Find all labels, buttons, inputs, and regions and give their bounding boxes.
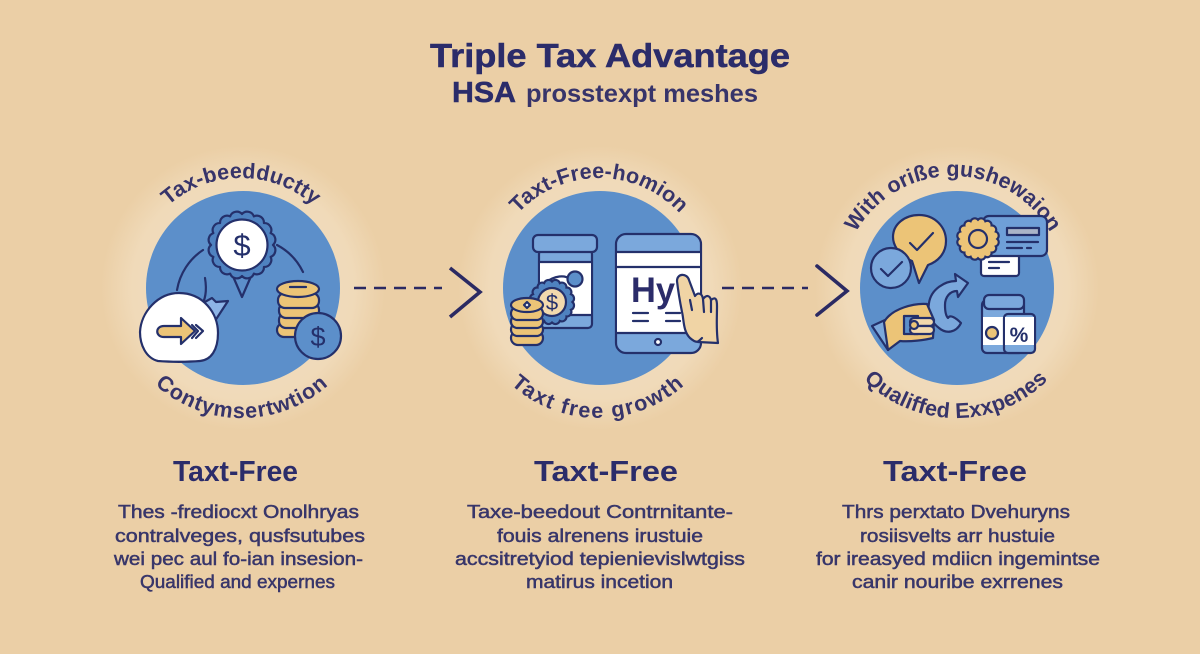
subtitle bbox=[452, 77, 758, 109]
icon: percent bottles bbox=[982, 295, 1035, 353]
halo 2 bbox=[458, 146, 742, 430]
description 3: canir nouribe exrrenes bbox=[852, 571, 1063, 592]
halo 1 bbox=[101, 146, 385, 430]
description 1: Qualified and expernes bbox=[140, 571, 335, 592]
title: Triple Tax Advantage bbox=[430, 37, 790, 74]
icon: dollar coin: $ bbox=[310, 322, 326, 352]
icon: speech bubble with check bbox=[893, 215, 946, 283]
description 2: Taxe-beedout Contrnitante- bbox=[467, 501, 733, 522]
icon: yellow gear bbox=[957, 218, 999, 260]
icon: dollar coin bbox=[295, 313, 341, 359]
curved label top 2: Taxt-Free-homion bbox=[508, 164, 686, 212]
icon: tablet bbox=[616, 234, 701, 353]
description 2: accsitretyiod tepienievislwtgiss bbox=[455, 548, 745, 569]
icon: gear with dollar bbox=[530, 280, 574, 324]
description 3 bbox=[816, 501, 1100, 592]
icon: tablet: Hy bbox=[631, 271, 676, 310]
description 3: for ireasyed mdiicn ingemintse bbox=[816, 548, 1100, 569]
description 2 bbox=[455, 501, 745, 592]
icon: pointing hand bbox=[677, 275, 718, 343]
icon: gear with dollar: $ bbox=[546, 290, 558, 315]
description 2: fouis alrenens irustuie bbox=[497, 525, 703, 546]
icon: settings card bbox=[983, 216, 1047, 256]
blue disc 2 bbox=[503, 191, 697, 385]
heading 1: Taxt-Free bbox=[173, 456, 298, 488]
description 3: Thrs perxtato Dvehuryns bbox=[842, 501, 1070, 522]
description 1: Thes -frediocxt Onolhryas bbox=[118, 501, 359, 522]
subtitle: prosstexpt meshes bbox=[526, 80, 758, 108]
icon: coin stack bbox=[511, 298, 543, 345]
arrow 2 bbox=[722, 266, 847, 315]
blue disc 3 bbox=[860, 191, 1054, 385]
icon: dollar badge: $ bbox=[233, 228, 251, 263]
curved label bottom 2: Taxt free growth bbox=[514, 373, 684, 421]
description 1: contralveges, qusfsutubes bbox=[115, 525, 365, 546]
icon: connector arcs bbox=[177, 245, 303, 308]
heading 2: Taxt-Free bbox=[534, 456, 678, 488]
curved label bottom 3: Qualiffed Exxpenes bbox=[866, 372, 1046, 418]
icon: jar bbox=[533, 235, 597, 328]
curved label bottom 1: Contymsertwtion bbox=[158, 376, 328, 418]
arrow 1 bbox=[354, 268, 480, 317]
icon: small document bbox=[981, 250, 1019, 276]
icon: check circle bbox=[871, 248, 911, 288]
icon: dollar badge bbox=[209, 212, 275, 297]
icon: coin stack bbox=[277, 281, 319, 337]
icon: hand holding card bbox=[872, 304, 934, 350]
panel: qualified expenses bbox=[816, 159, 1100, 592]
curved label top 1: Tax-beedductty bbox=[159, 162, 321, 204]
icon: percent bottles: % bbox=[1010, 324, 1029, 347]
description 2: matirus incetion bbox=[526, 571, 673, 592]
description 1: wei pec aul fo-ian insesion- bbox=[113, 548, 363, 569]
halo 3 bbox=[815, 146, 1099, 430]
icon: money bag with arrow bbox=[140, 293, 228, 362]
blue disc 1 bbox=[146, 191, 340, 385]
description 1 bbox=[113, 501, 365, 592]
panel: tax-free growth bbox=[455, 159, 745, 592]
description 3: rosiisvelts arr hustuie bbox=[860, 525, 1055, 546]
panel: tax-deductible contributions bbox=[113, 159, 372, 592]
subtitle: HSA bbox=[452, 77, 516, 109]
curved label top 3: With oriße gushewaion bbox=[843, 164, 1058, 232]
heading 3: Taxt-Free bbox=[883, 456, 1027, 488]
icon: curved arrow bbox=[928, 274, 968, 332]
